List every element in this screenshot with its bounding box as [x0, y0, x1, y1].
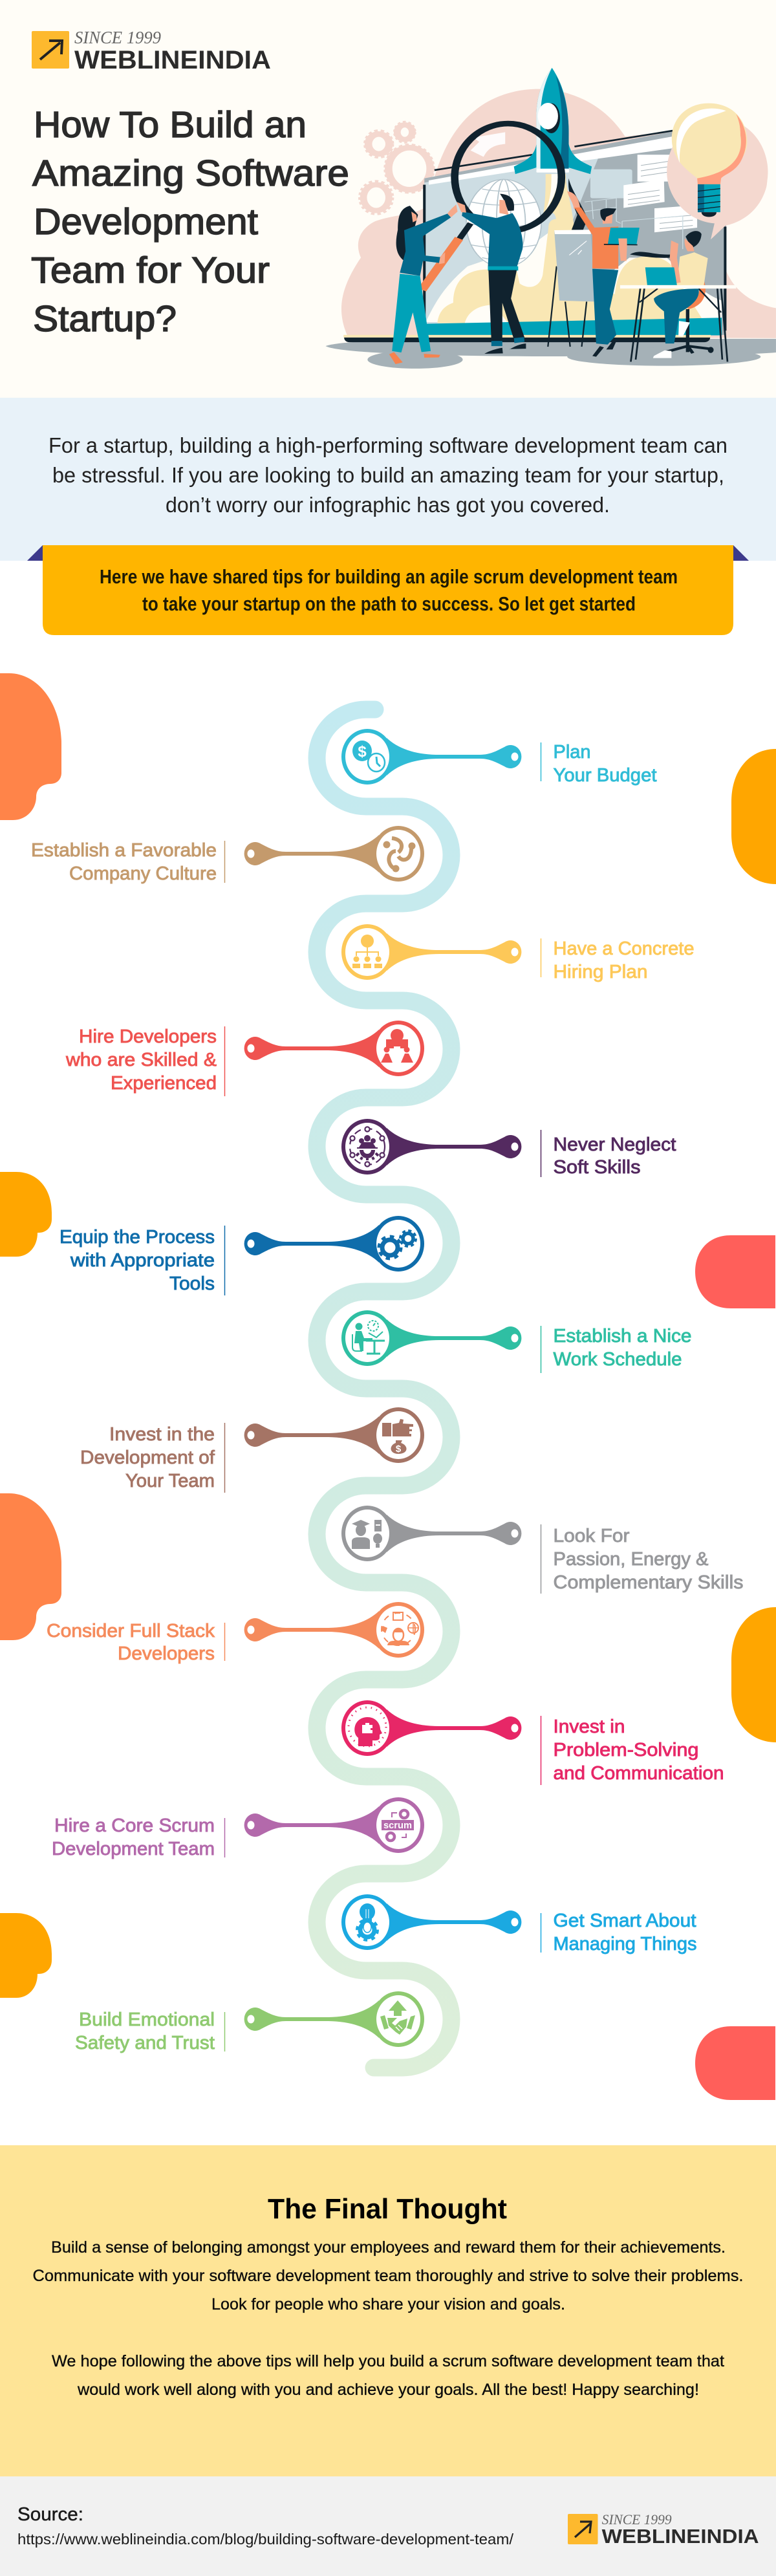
body text: We hope following the above tips will help you build a scrum software development team that — [52, 2352, 724, 2370]
icon: arrow over handshake — [380, 2000, 415, 2035]
step 9: passion and energy — [341, 1506, 744, 1594]
label — [47, 1621, 225, 1664]
label — [31, 840, 225, 884]
label — [541, 1130, 676, 1178]
label: Development Team — [52, 1839, 215, 1859]
label: Developers — [118, 1643, 215, 1664]
body text: would work well along with you and achieve your goals. All the best! Happy searching! — [77, 2381, 699, 2399]
title: Development — [34, 201, 258, 243]
label: who are Skilled & — [65, 1050, 217, 1070]
icon: developer with surrounding tech — [381, 1612, 418, 1645]
step 13: managing things — [341, 1894, 697, 1954]
title: Amazing Software — [32, 153, 349, 194]
rocket flame — [543, 174, 574, 230]
label: Problem-Solving — [554, 1740, 698, 1760]
icon: scrum badge with gears: scrum — [383, 1820, 412, 1831]
intro text: be stressful. If you are looking to build an amazing team for your startup, — [52, 463, 724, 487]
label: Build Emotional — [79, 2009, 215, 2030]
label: Consider Full Stack — [47, 1621, 215, 1641]
person: woman with magnifier — [389, 204, 458, 364]
footer logo: WEBLINEINDIA — [602, 2525, 759, 2548]
panel: header — [0, 0, 776, 398]
bulb speech bubble — [667, 118, 768, 239]
ground shadows — [326, 339, 776, 369]
source text — [17, 2504, 514, 2548]
label — [541, 938, 695, 982]
banner: shared tips: to take your startup on the path to success. So let get started — [142, 592, 636, 615]
body text: Look for people who share your vision and goals. — [211, 2295, 565, 2313]
icon: hierarchy of people — [352, 935, 382, 968]
label: Plan — [554, 742, 591, 763]
label: Hire a Core Scrum — [54, 1815, 215, 1836]
logo: WEBLINEINDIA — [74, 46, 271, 74]
body text — [32, 2238, 744, 2399]
label — [75, 2009, 225, 2053]
step 12: core scrum team — [52, 1797, 424, 1859]
panel: source footer — [0, 2476, 776, 2576]
banner: shared tips — [27, 545, 749, 635]
logo: SINCE 1999 — [74, 28, 161, 47]
label: Hiring Plan — [554, 962, 648, 982]
title: Team for Your — [31, 250, 270, 291]
step 10: full stack developers — [47, 1602, 424, 1664]
label: Never Neglect — [554, 1134, 676, 1155]
body text: Communicate with your software development team thoroughly and strive to solve their problems. — [32, 2267, 744, 2285]
icon: hand and money bag — [382, 1419, 413, 1455]
label: Development of — [80, 1447, 215, 1468]
step 8: team development — [80, 1407, 424, 1493]
step 14: emotional safety and trust — [75, 1991, 424, 2053]
label — [541, 1524, 744, 1594]
label: Tools — [169, 1273, 215, 1294]
step 2: company culture — [31, 826, 424, 884]
title: How To Build an — [34, 104, 307, 146]
flipchart — [548, 230, 596, 347]
decorative blobs — [0, 673, 776, 2100]
label: Managing Things — [554, 1934, 697, 1954]
intro text — [48, 433, 727, 517]
source text: Source: — [17, 2504, 83, 2525]
heading: The Final Thought — [268, 2193, 507, 2225]
label: Look For — [554, 1526, 630, 1546]
step 7: work schedule — [341, 1310, 692, 1373]
step 1: plan your budget — [341, 729, 657, 786]
logo — [32, 28, 271, 74]
label — [541, 1716, 724, 1785]
label: Safety and Trust — [75, 2033, 215, 2053]
label: Work Schedule — [554, 1349, 682, 1370]
icon: dollar and clock — [352, 741, 385, 772]
label — [541, 742, 657, 786]
label — [59, 1226, 225, 1295]
icon: head with puzzle piece — [349, 1707, 386, 1746]
step 11: problem solving — [341, 1700, 724, 1785]
label: Complementary Skills — [554, 1572, 744, 1593]
label: Get Smart About — [554, 1910, 696, 1931]
illustration: team with rocket, magnifier and lightbulb — [326, 68, 776, 369]
icon: scrum badge with gears — [382, 1810, 414, 1841]
source text: https://www.weblineindia.com/blog/building-software-development-team/ — [17, 2531, 514, 2548]
label — [65, 1026, 225, 1096]
label — [541, 1326, 692, 1373]
icon: two gears — [379, 1231, 416, 1259]
footer logo — [568, 2511, 759, 2548]
globe — [466, 179, 541, 267]
title — [31, 104, 349, 340]
gears — [360, 122, 433, 214]
magnifier — [422, 124, 561, 290]
step 5: soft skills — [341, 1119, 676, 1178]
person: man with laptop — [567, 191, 640, 357]
step 4: skilled developers — [65, 1021, 424, 1096]
title: Startup? — [33, 298, 177, 340]
serpentine track — [317, 709, 451, 2068]
label: Your Team — [125, 1471, 215, 1491]
intro text: don’t worry our infographic has got you covered. — [166, 493, 610, 517]
panel: intro — [0, 398, 776, 561]
icon: team on gear with network ring — [350, 1127, 385, 1167]
label: Company Culture — [69, 863, 217, 884]
person: seated woman at desk — [620, 231, 736, 362]
pink blob background — [341, 89, 776, 338]
body text: Build a sense of belonging amongst your employees and reward them for their achievements. — [51, 2238, 726, 2257]
intro text: For a startup, building a high-performing software development team can — [48, 433, 727, 457]
label — [541, 1910, 697, 1954]
icon: hand and money bag: $ — [396, 1444, 402, 1455]
icon: three swirling people — [383, 838, 415, 872]
label: Establish a Favorable — [31, 840, 217, 861]
label — [52, 1815, 225, 1859]
label: and Communication — [554, 1763, 724, 1784]
label: with Appropriate — [70, 1250, 215, 1271]
icon: bulb over gear — [357, 1903, 378, 1940]
footer logo: SINCE 1999 — [602, 2511, 672, 2527]
panel: the final thought — [0, 2145, 776, 2476]
label: Your Budget — [554, 765, 657, 786]
icon: person at desk with gauge — [352, 1321, 385, 1354]
step 3: hiring plan — [341, 924, 695, 982]
icon: bulb and two developers — [381, 1029, 413, 1063]
label: Have a Concrete — [554, 938, 695, 959]
label: Soft Skills — [554, 1157, 640, 1178]
banner: shared tips: Here we have shared tips for building an agile scrum development team — [100, 565, 678, 588]
step 6: appropriate tools — [59, 1216, 424, 1295]
person: man holding magnifier — [457, 194, 526, 354]
screen — [343, 131, 726, 342]
label: Experienced — [111, 1073, 217, 1094]
rocket — [514, 68, 592, 174]
label: Equip the Process — [59, 1227, 215, 1248]
label — [80, 1423, 225, 1493]
label: Hire Developers — [79, 1026, 217, 1047]
icon: graduate with bulb — [352, 1520, 382, 1549]
label: Invest in the — [109, 1424, 215, 1445]
label: Invest in — [554, 1716, 625, 1737]
lightbulb — [672, 103, 747, 217]
label: Passion, Energy & — [554, 1549, 709, 1570]
label: Establish a Nice — [554, 1326, 692, 1347]
icon: dollar and clock: $ — [358, 743, 367, 761]
